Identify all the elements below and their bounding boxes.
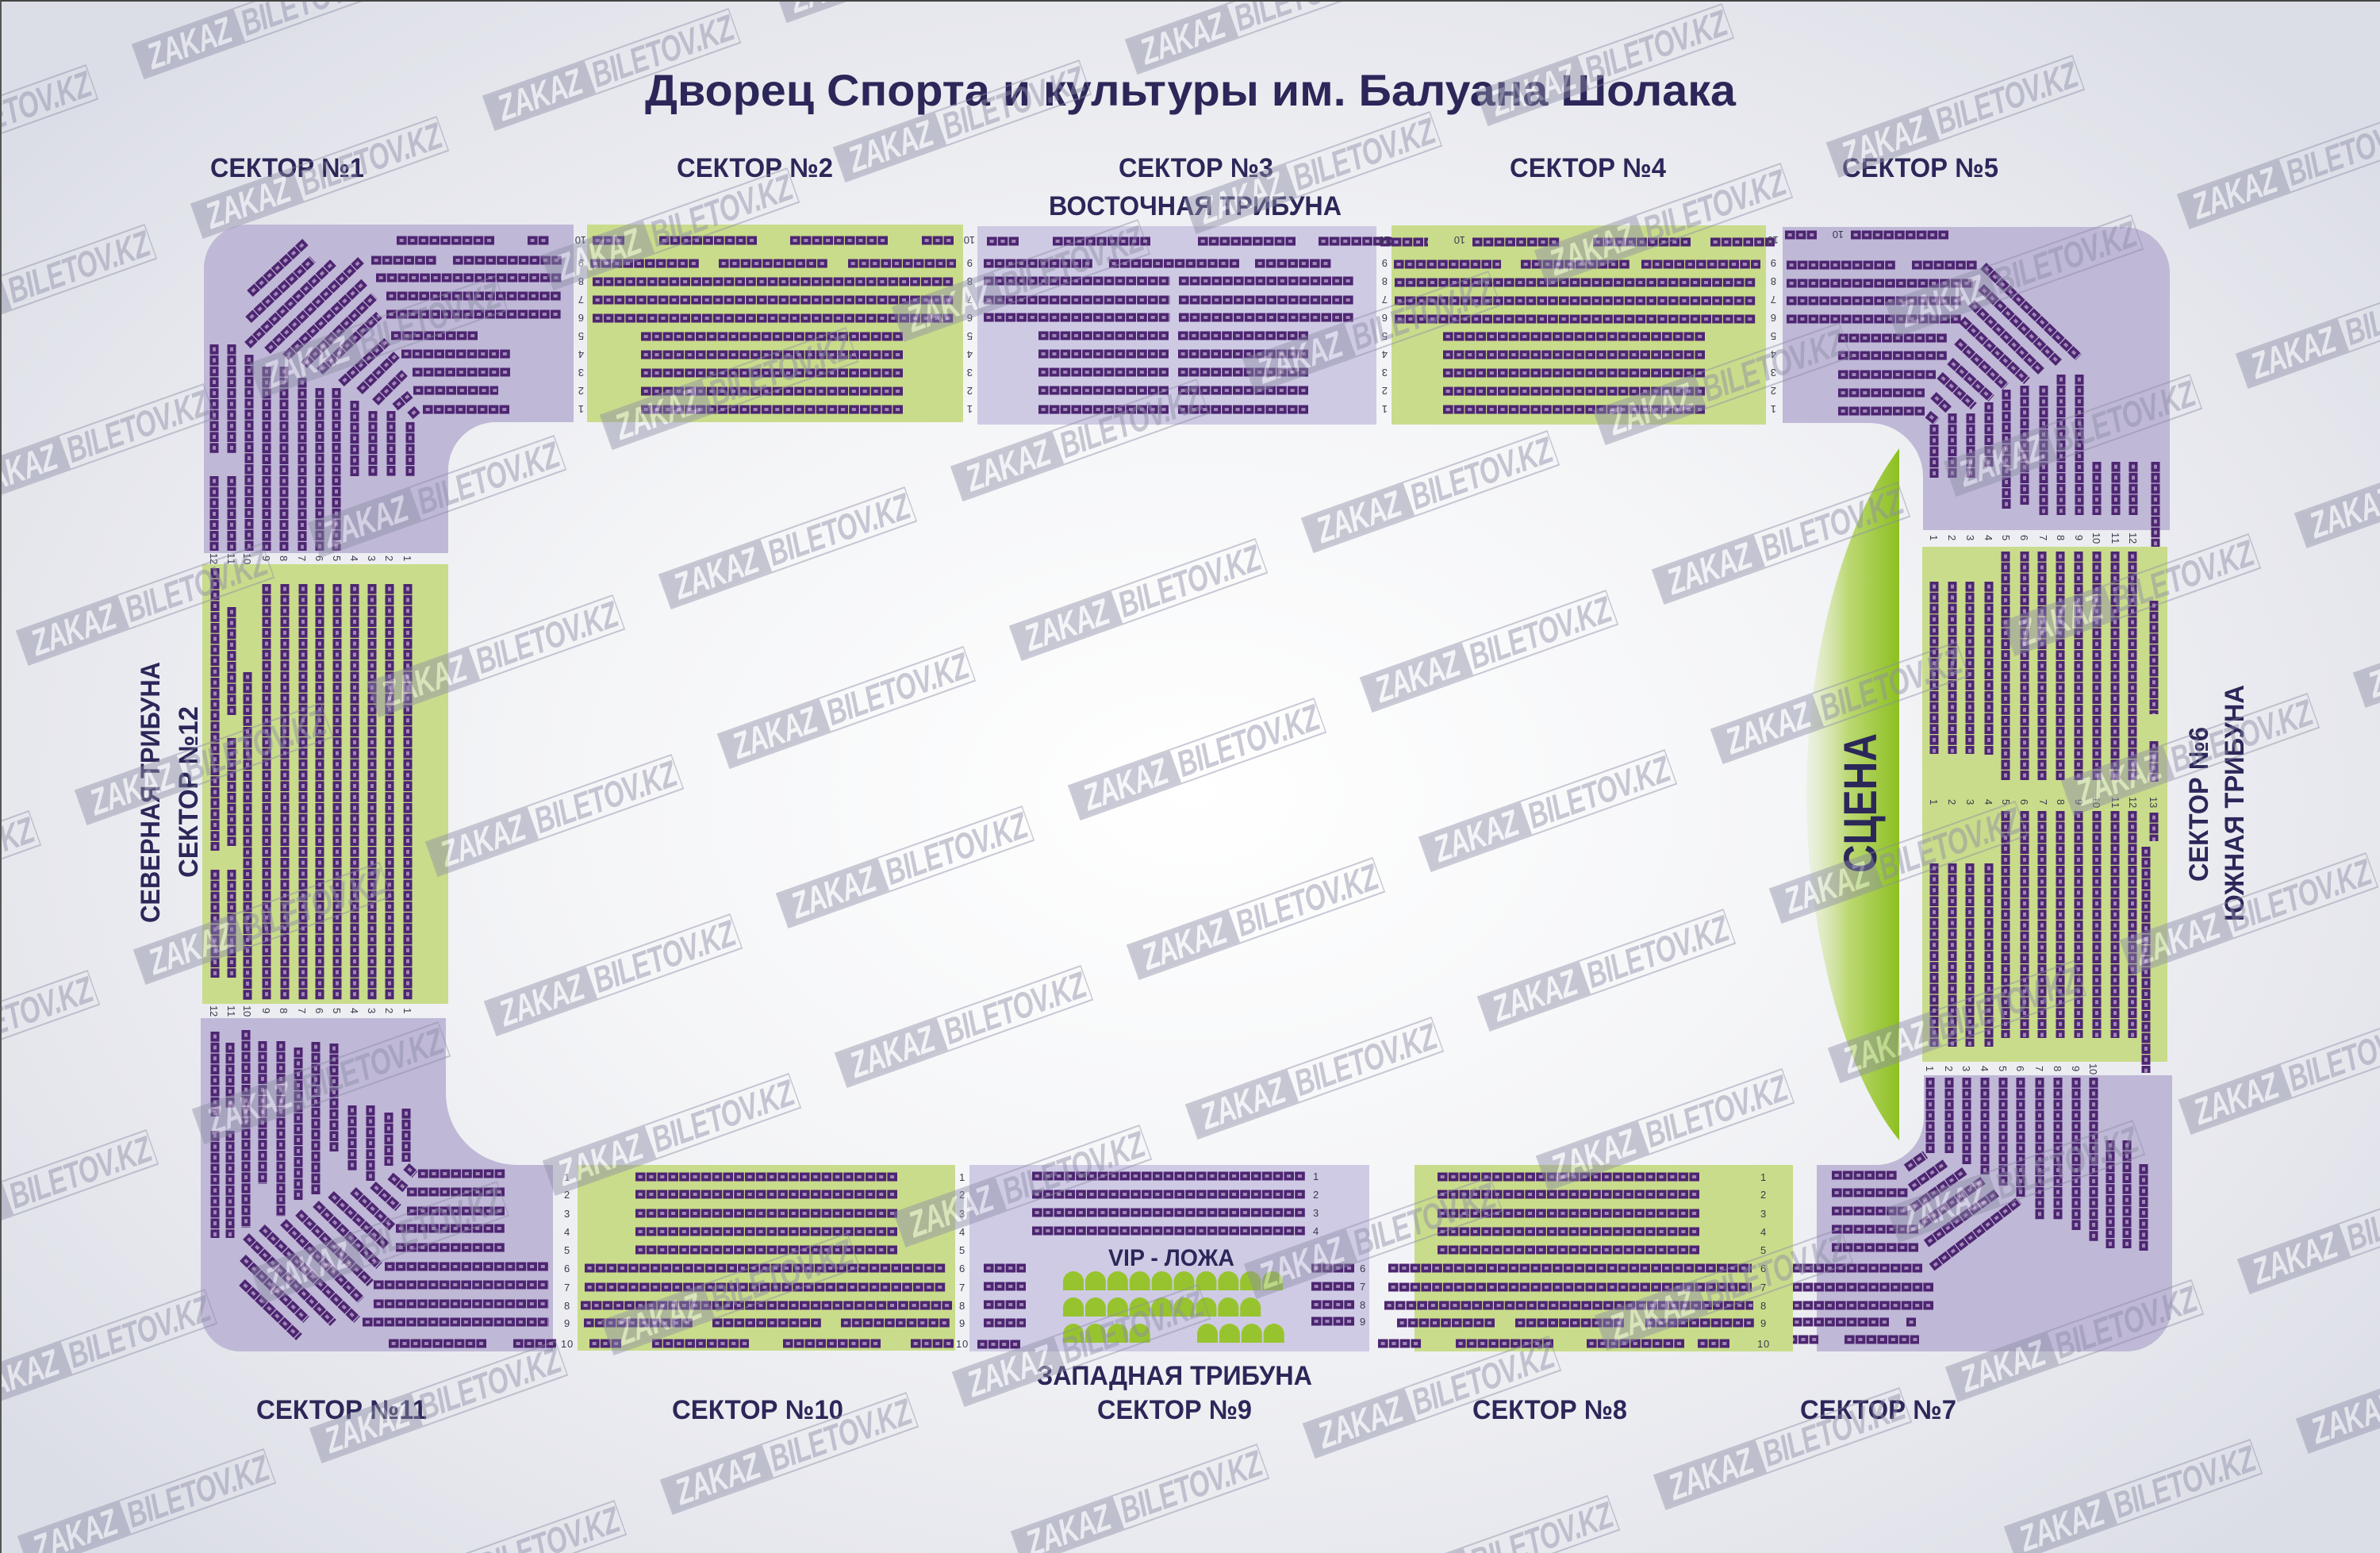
row numbers: 123456789101112 bbox=[1928, 532, 2139, 544]
watermark overlay: ZAKAZ bbox=[1720, 694, 1815, 762]
watermark overlay: ZAKAZ bbox=[551, 221, 646, 288]
watermark overlay: ZAKAZ bbox=[1077, 751, 1173, 818]
panel: sector 11 bbox=[201, 1018, 556, 1351]
label: sector 4: СЕКТОР №4 bbox=[1510, 153, 1666, 183]
watermark overlay: BILETOV.KZ bbox=[762, 486, 915, 574]
watermark overlay: BILETOV.KZ bbox=[879, 805, 1032, 893]
label: sector 9: СЕКТОР №9 bbox=[1097, 1395, 1252, 1425]
label: sector 10: СЕКТОР №10 bbox=[672, 1395, 843, 1425]
watermark overlay: BILETOV.KZ bbox=[703, 326, 856, 414]
watermark overlay: BILETOV.KZ bbox=[938, 964, 1091, 1052]
row numbers: 10987654321 bbox=[964, 234, 975, 415]
watermark overlay: ZAKAZ bbox=[1896, 1173, 1991, 1240]
watermark overlay: ZAKAZ bbox=[1136, 910, 1231, 978]
panel: sector 8 bbox=[1378, 1165, 1793, 1351]
VIP box seats bbox=[1063, 1271, 1284, 1343]
watermark overlay: ZAKAZ bbox=[1953, 427, 2048, 494]
label: sector 11: СЕКТОР №11 bbox=[256, 1395, 427, 1425]
watermark overlay: ZAKAZ bbox=[202, 1074, 297, 1142]
watermark overlay: ZAKAZ bbox=[319, 1393, 414, 1461]
watermark overlay: BILETOV.KZ bbox=[354, 1180, 507, 1268]
watermark overlay: ZAKAZ bbox=[903, 1178, 998, 1245]
watermark overlay: ZAKAZ bbox=[1019, 591, 1114, 659]
watermark overlay: ZAKAZ bbox=[317, 488, 413, 555]
watermark overlay: BILETOV.KZ bbox=[2164, 692, 2317, 780]
watermark overlay: BILETOV.KZ bbox=[1055, 1283, 1208, 1371]
watermark overlay: ZAKAZ bbox=[435, 807, 530, 875]
watermark overlay: BILETOV.KZ bbox=[1814, 640, 1967, 728]
watermark overlay: BILETOV.KZ bbox=[2047, 373, 2200, 461]
label: sector 1: СЕКТОР №1 bbox=[210, 153, 364, 183]
watermark overlay: ZAKAZ bbox=[376, 648, 471, 715]
watermark overlay: ZAKAZ bbox=[611, 1286, 706, 1353]
watermark overlay: BILETOV.KZ bbox=[646, 1072, 799, 1160]
watermark overlay: BILETOV.KZ bbox=[1698, 1227, 1851, 1315]
watermark overlay: ZAKAZ bbox=[141, 10, 236, 77]
watermark overlay: BILETOV.KZ bbox=[411, 434, 564, 522]
watermark overlay: BILETOV.KZ bbox=[1696, 321, 1849, 409]
watermark overlay: BILETOV.KZ bbox=[1054, 378, 1207, 466]
watermark overlay: BILETOV.KZ bbox=[236, 861, 390, 949]
watermark overlay: ZAKAZ bbox=[259, 329, 354, 396]
row numbers: 10 bbox=[1454, 234, 1465, 246]
watermark overlay: ZAKAZ bbox=[143, 915, 238, 982]
row numbers: 10987654321 bbox=[575, 234, 586, 415]
watermark overlay: ZAKAZ bbox=[1779, 854, 1874, 921]
watermark overlay: ZAKAZ bbox=[1603, 375, 1698, 443]
panel: sector 2 bbox=[587, 225, 963, 422]
label: north stand: СЕВЕРНАЯ ТРИБУНА bbox=[136, 662, 166, 923]
watermark overlay: BILETOV.KZ bbox=[1230, 856, 1383, 944]
watermark overlay: ZAKAZ bbox=[84, 755, 179, 823]
watermark overlay: ZAKAZ bbox=[2188, 1065, 2283, 1132]
watermark overlay: BILETOV.KZ bbox=[2107, 1438, 2260, 1526]
label: south stand: ЮЖНАЯ ТРИБУНА bbox=[2220, 685, 2250, 921]
watermark overlay: BILETOV.KZ bbox=[60, 382, 213, 471]
watermark overlay: ZAKAZ bbox=[843, 113, 938, 180]
row numbers: 12345678910 bbox=[561, 1171, 573, 1350]
row numbers: 12345678910 bbox=[1924, 1063, 2099, 1074]
watermark overlay: ZAKAZ bbox=[1369, 643, 1464, 710]
watermark overlay: BILETOV.KZ bbox=[996, 1124, 1150, 1212]
watermark overlay: BILETOV.KZ bbox=[1929, 54, 2082, 142]
watermark overlay: BILETOV.KZ bbox=[1347, 1175, 1500, 1263]
watermark overlay: ZAKAZ bbox=[1487, 962, 1582, 1029]
watermark overlay: BILETOV.KZ bbox=[1345, 270, 1499, 358]
row numbers bbox=[208, 229, 2159, 1350]
watermark overlay: ZAKAZ bbox=[2245, 319, 2340, 386]
panel: sector 12 bbox=[202, 564, 448, 1004]
watermark overlay: BILETOV.KZ bbox=[585, 7, 739, 95]
watermark overlay: BILETOV.KZ bbox=[178, 702, 331, 790]
watermark overlay: ZAKAZ bbox=[1195, 1070, 1290, 1137]
watermark overlay: ZAKAZ bbox=[1312, 1389, 1407, 1456]
watermark overlay: ZAKAZ bbox=[1663, 1440, 1758, 1508]
watermark overlay: ZAKAZ bbox=[1544, 216, 1639, 283]
watermark overlay: ZAKAZ bbox=[493, 967, 589, 1034]
panel: sector 3 bbox=[977, 226, 1428, 425]
row numbers: 10 bbox=[1833, 229, 1844, 240]
panel: sector 9 bbox=[969, 1165, 1369, 1351]
watermark overlay: BILETOV.KZ bbox=[1756, 1386, 1910, 1474]
watermark overlay: BILETOV.KZ bbox=[820, 645, 973, 733]
watermark overlay: BILETOV.KZ bbox=[995, 218, 1148, 306]
panel: sector 10 bbox=[578, 1165, 955, 1351]
label: sector 3: СЕКТОР №3 bbox=[1119, 153, 1273, 183]
panel: sector 5 bbox=[1783, 227, 2170, 567]
watermark overlay: BILETOV.KZ bbox=[2048, 1278, 2202, 1367]
watermark overlay: BILETOV.KZ bbox=[1990, 1119, 2143, 1207]
row numbers: 12345678910111213 bbox=[1928, 797, 2159, 808]
watermark overlay: BILETOV.KZ bbox=[936, 59, 1089, 147]
watermark overlay: BILETOV.KZ bbox=[1114, 1443, 1267, 1531]
watermark overlay: BILETOV.KZ bbox=[1287, 110, 1440, 198]
title: Дворец Спорта и культуры им. Балуана Шолака bbox=[645, 65, 1737, 115]
row numbers: 10987654321 bbox=[1768, 234, 1779, 415]
watermark overlay: ZAKAZ bbox=[1894, 267, 1990, 335]
stage shape bbox=[1806, 448, 1899, 1140]
watermark overlay: ZAKAZ bbox=[1836, 108, 1931, 175]
label: sector 8: СЕКТОР №8 bbox=[1472, 1395, 1627, 1425]
panel: sector 7 bbox=[1781, 1075, 2172, 1351]
panel: sector 4 bbox=[1380, 225, 1775, 425]
row numbers: 12345678910 bbox=[1757, 1171, 1769, 1350]
label: east stand: ВОСТОЧНАЯ ТРИБУНА bbox=[1049, 191, 1342, 221]
watermark overlay: BILETOV.KZ bbox=[294, 115, 447, 203]
watermark overlay: ZAKAZ bbox=[1604, 1281, 1699, 1348]
watermark overlay: BILETOV.KZ bbox=[763, 1391, 916, 1479]
watermark overlay: BILETOV.KZ bbox=[1580, 908, 1733, 996]
watermark overlay: ZAKAZ bbox=[492, 61, 587, 129]
watermark overlay: ZAKAZ bbox=[552, 1126, 647, 1194]
watermark overlay: ZAKAZ bbox=[1837, 1013, 1933, 1081]
watermark overlay: ZAKAZ bbox=[2247, 1224, 2342, 1292]
watermark overlay: ZAKAZ bbox=[200, 169, 295, 236]
watermark overlay: BILETOV.KZ bbox=[1171, 697, 1324, 785]
label: sector 6: СЕКТОР №6 bbox=[2184, 727, 2214, 882]
watermark overlay: BILETOV.KZ bbox=[2106, 532, 2259, 621]
watermark overlay: BILETOV.KZ bbox=[119, 542, 272, 630]
row numbers: 12345678910 bbox=[956, 1171, 968, 1350]
watermark overlay: BILETOV.KZ bbox=[1463, 589, 1616, 677]
row numbers: 121110987654321 bbox=[208, 553, 413, 564]
watermark overlay: BILETOV.KZ bbox=[1931, 959, 2084, 1048]
label: sector 7: СЕКТОР №7 bbox=[1800, 1395, 1956, 1425]
watermark overlay: BILETOV.KZ bbox=[1288, 1016, 1441, 1104]
watermark overlay: BILETOV.KZ bbox=[295, 1021, 448, 1109]
watermark overlay: ZAKAZ bbox=[1193, 164, 1288, 232]
watermark overlay: ZAKAZ bbox=[1253, 1229, 1349, 1297]
watermark overlay: BILETOV.KZ bbox=[1637, 162, 1791, 250]
panel: sector 1 bbox=[204, 225, 574, 553]
watermark overlay: BILETOV.KZ bbox=[121, 1447, 274, 1536]
watermark overlay: BILETOV.KZ bbox=[1872, 800, 2025, 888]
watermark overlay: BILETOV.KZ bbox=[3, 1128, 156, 1217]
watermark overlay: ZAKAZ bbox=[1661, 535, 1756, 602]
watermark overlay: ZAKAZ bbox=[1252, 324, 1347, 391]
watermark overlay: BILETOV.KZ bbox=[587, 913, 740, 1001]
watermark overlay: BILETOV.KZ bbox=[1988, 213, 2141, 302]
watermark overlay: ZAKAZ bbox=[844, 1018, 939, 1086]
watermark overlay: ZAKAZ bbox=[2071, 746, 2166, 813]
VIP box heading: VIP - ЛОЖА bbox=[1108, 1245, 1234, 1271]
watermark overlay: BILETOV.KZ bbox=[704, 1232, 858, 1320]
watermark overlay: BILETOV.KZ bbox=[470, 594, 623, 682]
watermark overlay: ZAKAZ bbox=[727, 699, 822, 767]
watermark overlay: ZAKAZ bbox=[670, 1445, 765, 1513]
watermark overlay: BILETOV.KZ bbox=[2, 223, 155, 311]
panel: sector 6 bbox=[1922, 547, 2167, 1073]
watermark overlay: BILETOV.KZ bbox=[1579, 2, 1732, 90]
watermark overlay: BILETOV.KZ bbox=[1639, 1067, 1792, 1155]
watermark overlay: ZAKAZ bbox=[1428, 802, 1523, 870]
watermark overlay: ZAKAZ bbox=[1545, 1121, 1641, 1189]
label: west stand: ЗАПАДНАЯ ТРИБУНА bbox=[1037, 1361, 1312, 1391]
label: sector 2: СЕКТОР №2 bbox=[677, 153, 833, 183]
watermark overlay: BILETOV.KZ bbox=[2223, 851, 2376, 940]
watermark overlay: ZAKAZ bbox=[962, 1337, 1057, 1405]
watermark overlay: BILETOV.KZ bbox=[1522, 748, 1675, 836]
label: sector 12: СЕКТОР №12 bbox=[174, 706, 204, 878]
row numbers: 10987654321 bbox=[1379, 234, 1390, 415]
watermark overlay: BILETOV.KZ bbox=[1755, 481, 1908, 569]
watermark overlay: ZAKAZ bbox=[960, 432, 1055, 499]
watermark overlay: ZAKAZ bbox=[1311, 483, 1406, 551]
watermark overlay: ZAKAZ bbox=[260, 1234, 355, 1301]
stage label: СЦЕНА bbox=[1835, 733, 1887, 873]
row numbers: 1234 bbox=[1313, 1171, 1319, 1237]
label: sector 5: СЕКТОР №5 bbox=[1842, 153, 1998, 183]
watermark overlay: BILETOV.KZ bbox=[1406, 1335, 1559, 1423]
watermark overlay: ZAKAZ bbox=[25, 596, 121, 663]
watermark overlay: ZAKAZ bbox=[901, 272, 996, 340]
watermark overlay: ZAKAZ bbox=[609, 380, 704, 448]
watermark overlay: ZAKAZ bbox=[2012, 586, 2107, 654]
watermark overlay: ZAKAZ bbox=[2186, 160, 2282, 227]
watermark overlay: ZAKAZ bbox=[668, 540, 763, 607]
watermark overlay: ZAKAZ bbox=[1134, 5, 1230, 72]
watermark overlay: ZAKAZ bbox=[1485, 56, 1580, 124]
watermark overlay: ZAKAZ bbox=[2129, 905, 2225, 973]
watermark overlay: BILETOV.KZ bbox=[1112, 537, 1265, 625]
row numbers: 121110987654321 bbox=[208, 1005, 413, 1017]
watermark overlay: BILETOV.KZ bbox=[62, 1288, 215, 1376]
watermark overlay: BILETOV.KZ bbox=[644, 167, 797, 255]
watermark overlay: ZAKAZ bbox=[1955, 1332, 2050, 1400]
watermark overlay: BILETOV.KZ bbox=[413, 1340, 566, 1428]
row numbers: 6789 bbox=[1360, 1263, 1365, 1328]
watermark overlay: BILETOV.KZ bbox=[352, 275, 505, 363]
watermark overlay: ZAKAZ bbox=[785, 859, 881, 926]
watermark overlay: BILETOV.KZ bbox=[528, 753, 681, 841]
watermark overlay: BILETOV.KZ bbox=[1404, 429, 1557, 517]
